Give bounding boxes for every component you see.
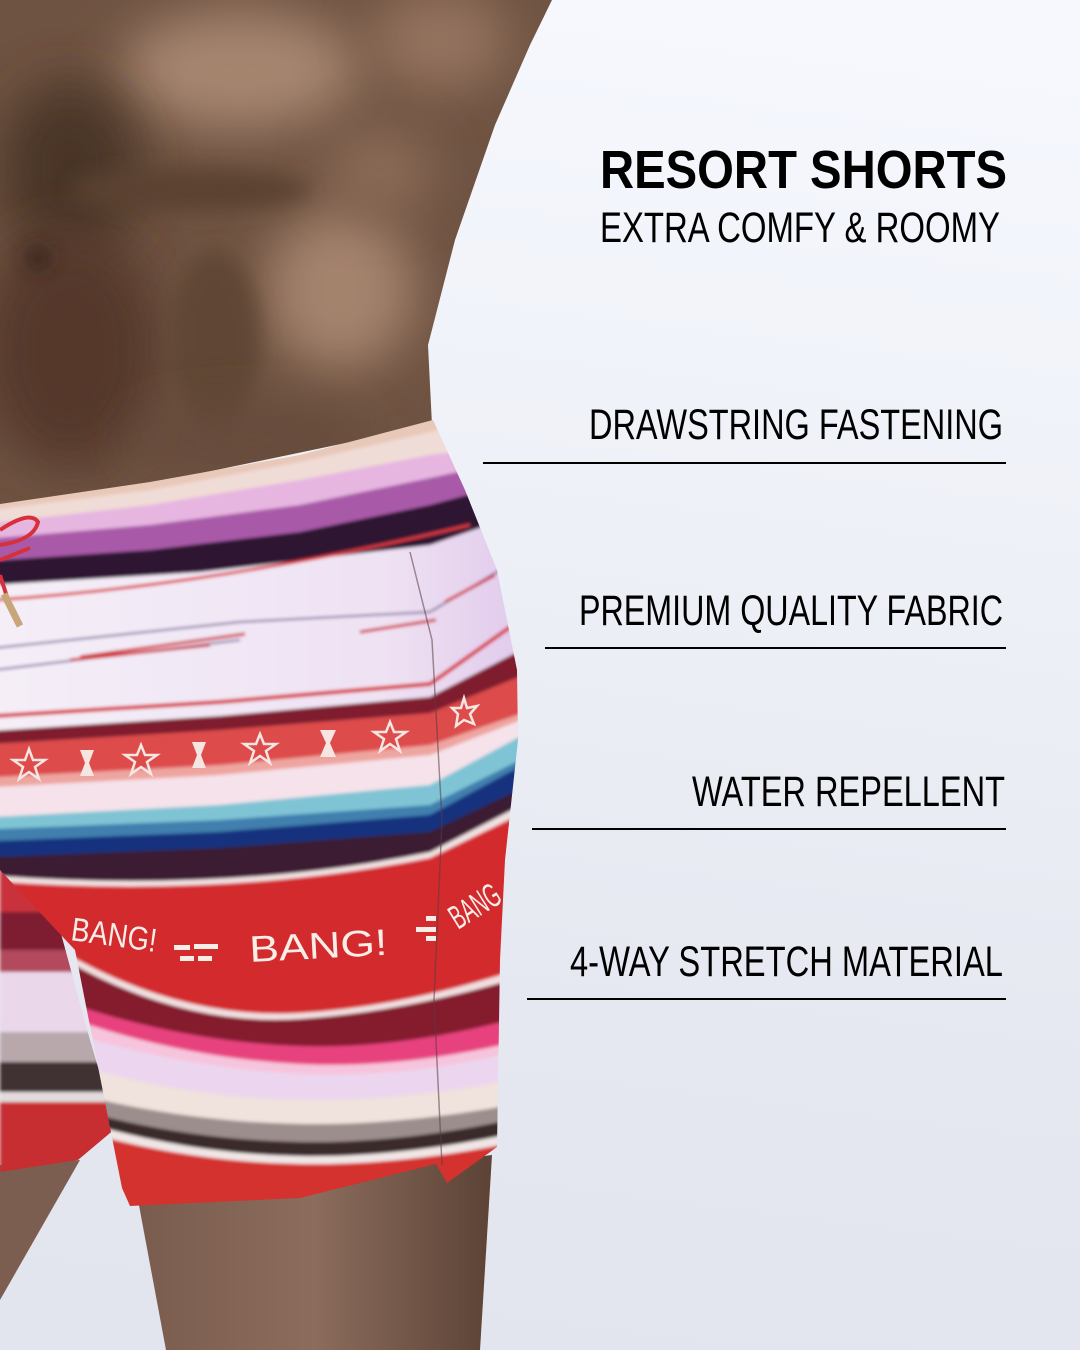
star 5 bbox=[452, 698, 477, 726]
side seam bbox=[410, 552, 442, 1165]
back leg of shorts bbox=[0, 870, 111, 1172]
star 4 bbox=[374, 722, 406, 751]
logo: BANG left: BANG! bbox=[69, 910, 159, 959]
shorts logo text bbox=[69, 876, 508, 970]
red logo band bbox=[3, 806, 511, 890]
drawstring tip bbox=[4, 594, 20, 626]
logo: BANG centre: BANG! bbox=[248, 922, 388, 970]
star 1 bbox=[13, 749, 45, 779]
star 3 bbox=[244, 734, 276, 763]
model right leg bbox=[138, 1155, 492, 1350]
star 2 bbox=[125, 745, 157, 774]
model torso bbox=[0, 0, 560, 520]
serape stripes bbox=[0, 620, 520, 716]
white and lilac upper panel bbox=[0, 524, 514, 734]
model left leg bbox=[0, 1160, 80, 1300]
logo marks bbox=[174, 916, 436, 961]
title: RESORT SHORTS bbox=[600, 140, 1007, 200]
lower stripes bbox=[76, 956, 500, 1024]
hourglass marks bbox=[80, 730, 336, 776]
logo: BANG right: BANG bbox=[442, 876, 508, 937]
waistband bbox=[0, 420, 481, 587]
star pattern bbox=[13, 698, 477, 779]
drawstring bbox=[0, 518, 38, 626]
resort shorts garment bbox=[0, 420, 518, 1206]
